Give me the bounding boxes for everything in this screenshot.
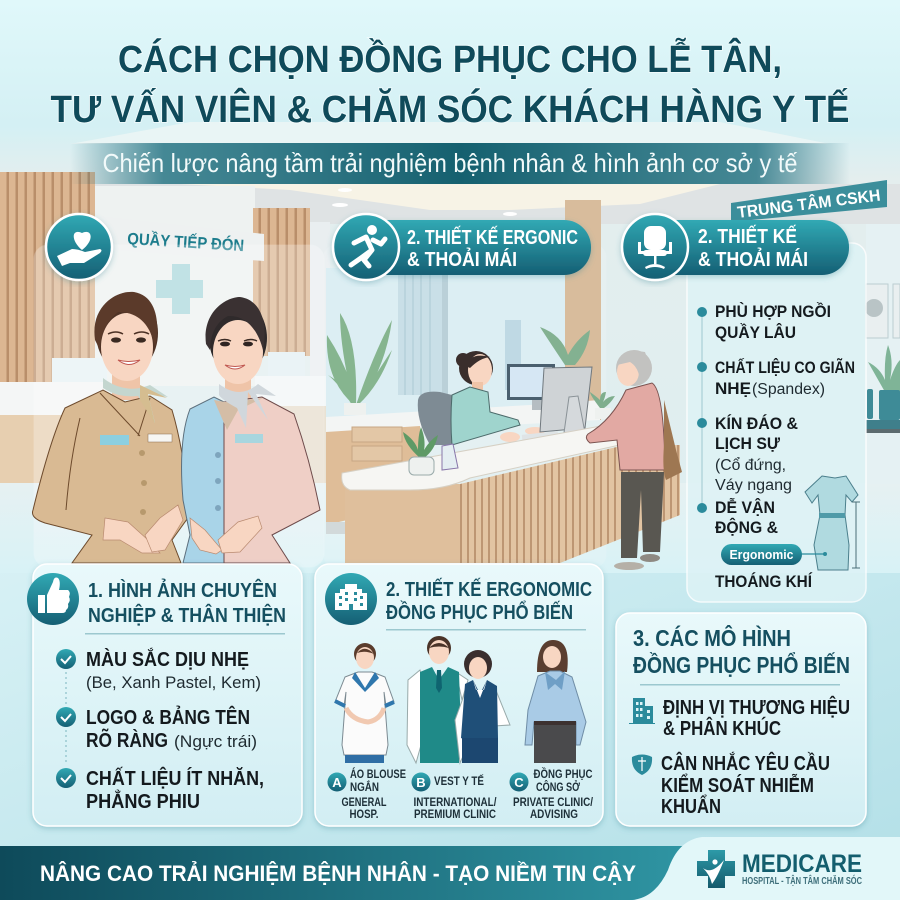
icon: chair [638,226,672,269]
footer banner [0,846,690,900]
footer banner: NÂNG CAO TRẢI NGHIỆM BỆNH NHÂN - TẠO NIỀM TIN CẬY [40,861,636,886]
icon: medical shield [632,754,652,775]
cross on wall [156,264,203,314]
sign: quầy tiếp đón: QUẦY TIẾP ĐÓN [127,229,245,255]
item: easy to move: ĐỘNG & [715,518,778,537]
small plant right [590,392,615,419]
panel: glass counter photo [324,245,606,567]
receptionist in blue and pink uniform [182,297,320,563]
label C: ĐỒNG PHỤC [534,768,592,781]
item: soft colours: MÀU SẮC DỊU NHẸ [86,647,249,671]
logo panel [632,837,900,900]
label A: GENERAL [342,797,386,809]
back desk [326,400,600,435]
subtitle band: Chiến lược nâng tầm trải nghiệm bệnh nhân & hình ảnh cơ sở y tế [102,148,798,178]
icon: hospital [325,573,377,625]
subtitle band [70,143,850,184]
title: TƯ VẤN VIÊN & CHĂM SÓC KHÁCH HÀNG Y TẾ [50,87,850,131]
header pill: thiết kế và thoải mái [622,214,849,280]
label A [328,768,406,821]
item: easy to move: THOÁNG KHÍ [715,572,813,591]
item: long sitting: PHÙ HỢP NGỒI [715,302,831,321]
item: logo and name badge: LOGO & BẢNG TÊN [86,705,250,729]
header badge: caring hand [46,214,112,280]
item: elastic fabric [697,357,855,398]
header pill: ergonomic: & THOẢI MÁI [407,248,517,271]
heading [386,578,592,624]
receptionist in beige uniform [32,292,190,563]
illustration: two receptionists [32,292,320,563]
icon: runner [351,225,385,266]
sign: trung tâm cskh: TRUNG TÂM CSKH [736,186,881,222]
label A: NGẮN [350,781,379,794]
label B [412,772,497,821]
item: infection control: CÂN NHẮC YÊU CẦU [661,751,830,775]
computer on back desk [507,364,555,410]
header pill: ergonomic [333,214,591,280]
item: soft colours [56,647,261,692]
label C: ADVISING [530,809,578,821]
heading: NGHIỆP & THÂN THIỆN [88,603,286,627]
tag: ergonomic [721,544,827,565]
item: logo and name badge: (Ngực trái) [174,732,257,751]
item: easy to move: DỄ VẬN [715,498,775,517]
item: elastic fabric: NHẸ [715,379,751,398]
wordmark: HOSPITAL - TẬN TÂM CHĂM SÓC [742,874,862,887]
plant right [540,327,590,365]
title [50,37,850,131]
icon: building [629,698,655,724]
panel: professional image [27,564,302,826]
heading: ĐỒNG PHỤC PHỔ BIẾN [386,600,573,624]
label C [510,768,594,821]
header pill: thiết kế và thoải mái: 2. THIẾT KẾ [698,225,797,248]
label A: ÁO BLOUSE [350,768,406,781]
item: brand positioning: & PHÂN KHÚC [663,716,781,740]
item: brand positioning [663,695,850,740]
wordmark: MEDICARE [742,850,862,878]
front counter [342,424,680,563]
item: infection control [661,751,830,818]
plant left [327,313,392,415]
label B: PREMIUM CLINIC [414,809,496,821]
desk plant [403,427,438,475]
heading: 1. HÌNH ẢNH CHUYÊN [88,578,277,602]
heading [88,578,286,627]
label C: C [514,775,524,790]
panel: glass reception photo [34,245,324,567]
header pill: ergonomic: 2. THIẾT KẾ ERGONIC [407,226,578,249]
wordmark [742,850,862,887]
item: elastic fabric: CHẤT LIỆU CO GIÃN [715,357,855,377]
desk sign [442,444,458,470]
item: modest: KÍN ĐÁO & [715,414,798,433]
icon: thumbs up [27,573,79,625]
item: modest: (Cổ đứng, [715,457,786,474]
illustration: counter scene [326,200,682,570]
heading: 2. THIẾT KẾ ERGONOMIC [386,578,592,601]
label B: INTERNATIONAL/ [414,797,497,809]
item: logo and name badge: RÕ RÀNG [86,728,168,752]
label A: A [332,775,342,790]
item: infection control: KIỂM SOÁT NHIỄM [661,774,814,797]
item: logo and name badge [56,705,257,752]
header pill: thiết kế và thoải mái: & THOẢI MÁI [698,248,808,271]
label B: B [416,775,426,790]
item: wrinkle-free fabric: PHẲNG PHIU [86,790,200,813]
heading: ĐỒNG PHỤC PHỔ BIẾN [633,651,850,678]
elderly visitor [586,350,682,570]
item: long sitting [697,302,831,342]
item: infection control: KHUẨN [661,795,721,818]
icon: dress with measure [805,476,860,570]
care center list [697,302,860,591]
item: modest: Váy ngang [715,477,792,494]
receptionist seated [418,351,545,445]
main monitor [522,367,592,441]
label B: VEST Y TẾ [434,775,484,788]
item: wrinkle-free fabric: CHẤT LIỆU ÍT NHĂN, [86,766,264,790]
sign: quầy tiếp đón [100,216,264,261]
icon: heart in hand [57,232,102,266]
item: brand positioning: ĐỊNH VỊ THƯƠNG HIỆU [663,695,850,719]
heading [633,624,850,678]
item: modest [697,414,798,494]
item: modest: LỊCH SỰ [715,434,781,453]
tag: ergonomic: Ergonomic [730,547,794,562]
label C: CÔNG SỞ [536,781,580,794]
figure A: short blouse [335,643,394,763]
title: CÁCH CHỌN ĐỒNG PHỤC CHO LỄ TÂN, [118,37,782,81]
panel: popular uniforms [315,564,603,826]
label A: HOSP. [350,809,378,821]
figure B: medical vests [407,636,510,763]
heading: 3. CÁC MÔ HÌNH [633,624,791,651]
right waiting area [865,224,900,484]
icon: medicare cross [697,850,735,888]
figure C: office uniform [525,640,586,763]
item: long sitting: QUẦY LÂU [715,323,796,342]
label C: PRIVATE CLINIC/ [513,797,594,809]
item: soft colours: (Be, Xanh Pastel, Kem) [86,673,261,692]
reception hall scene [0,172,900,573]
item: elastic fabric: (Spandex) [752,381,825,398]
item: easy to move [697,498,813,591]
item: wrinkle-free fabric [56,766,264,813]
panel: uniform models [616,613,866,826]
panel: care center glass card [687,243,866,602]
